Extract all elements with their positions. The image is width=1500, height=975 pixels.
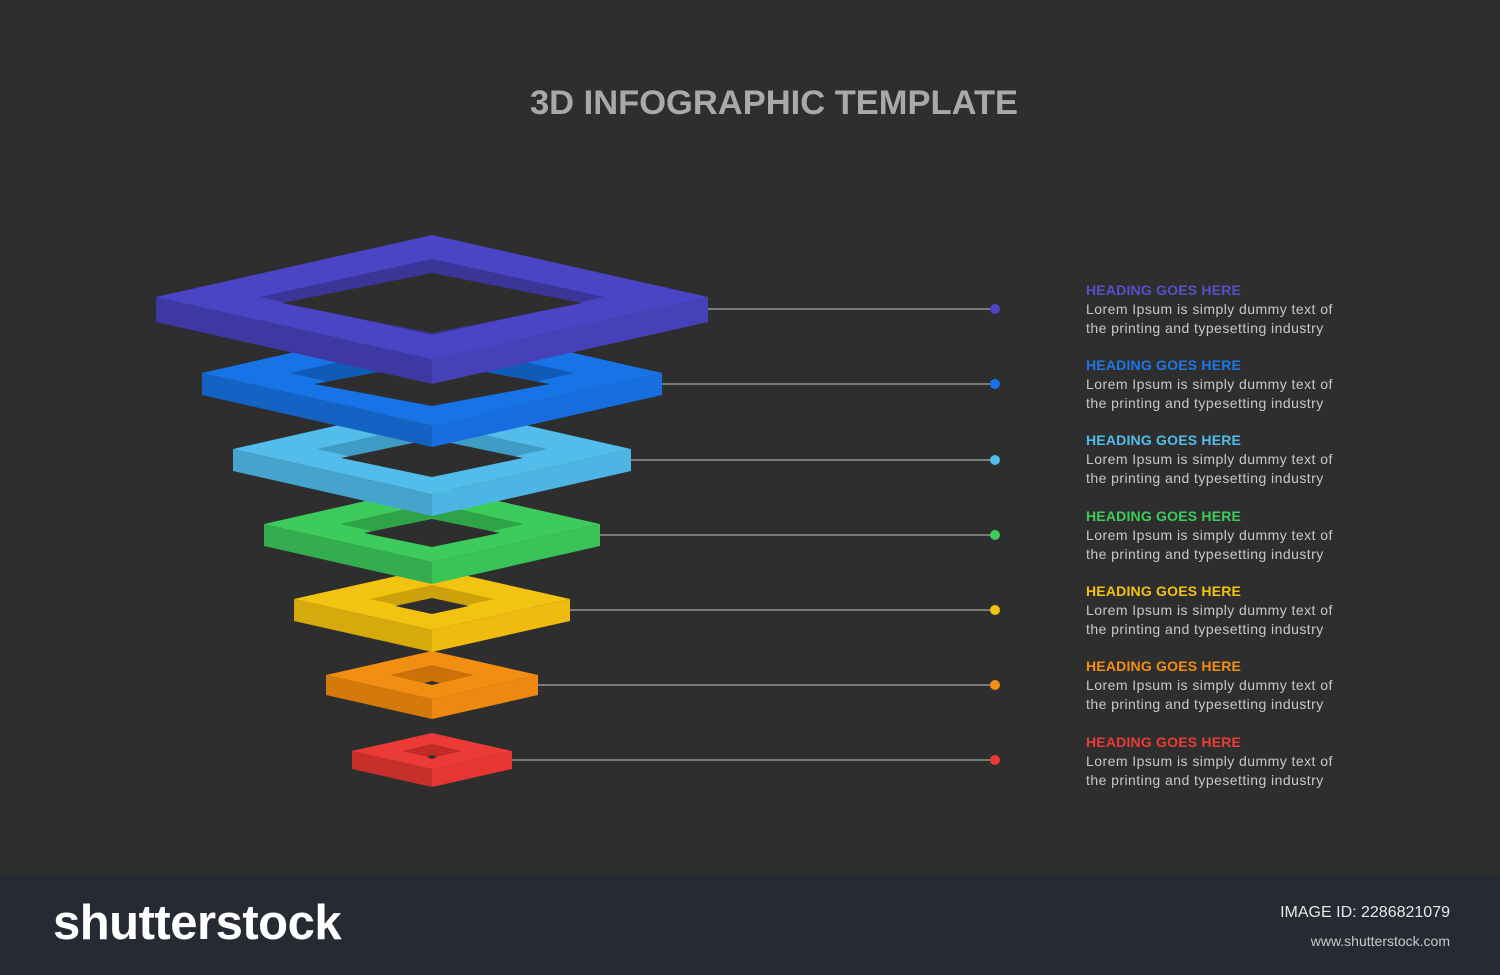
- text block 7: the printing and typesetting industry: [1086, 772, 1324, 788]
- dots: [990, 304, 1000, 765]
- text block 3: [1086, 432, 1333, 486]
- text block 1: the printing and typesetting industry: [1086, 320, 1324, 336]
- text block 6: Lorem Ipsum is simply dummy text of: [1086, 677, 1333, 693]
- text block 6: [1086, 658, 1333, 712]
- frame 2 blue: [202, 321, 662, 447]
- text block 7: HEADING GOES HERE: [1086, 734, 1241, 750]
- text block 1: [1086, 282, 1333, 336]
- text block 3: Lorem Ipsum is simply dummy text of: [1086, 451, 1333, 467]
- footer logo: shutterstock: [53, 896, 341, 950]
- text block 5: HEADING GOES HERE: [1086, 583, 1241, 599]
- footer url: www.shutterstock.com: [1311, 933, 1450, 949]
- text block 4: [1086, 508, 1333, 562]
- text block 2: HEADING GOES HERE: [1086, 357, 1241, 373]
- frame 5 yellow: [294, 568, 570, 652]
- text block 1: Lorem Ipsum is simply dummy text of: [1086, 301, 1333, 317]
- frame 1 purple: [156, 235, 708, 384]
- frame 3 light blue: [233, 404, 631, 516]
- text block 5: [1086, 583, 1333, 637]
- text block 3: the printing and typesetting industry: [1086, 470, 1324, 486]
- frame 6 orange: [326, 651, 538, 719]
- footer image id: IMAGE ID: 2286821079: [1280, 904, 1450, 921]
- text block 2: [1086, 357, 1333, 411]
- text block 2: Lorem Ipsum is simply dummy text of: [1086, 376, 1333, 392]
- text block 4: the printing and typesetting industry: [1086, 546, 1324, 562]
- text block 6: the printing and typesetting industry: [1086, 696, 1324, 712]
- text block 6: HEADING GOES HERE: [1086, 658, 1241, 674]
- text block 4: Lorem Ipsum is simply dummy text of: [1086, 527, 1333, 543]
- text block 4: HEADING GOES HERE: [1086, 508, 1241, 524]
- text block 1: HEADING GOES HERE: [1086, 282, 1241, 298]
- frame 4 green: [264, 486, 600, 584]
- connector lines: [512, 309, 995, 760]
- text block 5: the printing and typesetting industry: [1086, 621, 1324, 637]
- footer bar: [0, 875, 1500, 975]
- title: 3D INFOGRAPHIC TEMPLATE: [530, 84, 1018, 122]
- text block 7: Lorem Ipsum is simply dummy text of: [1086, 753, 1333, 769]
- text block 5: Lorem Ipsum is simply dummy text of: [1086, 602, 1333, 618]
- text block 3: HEADING GOES HERE: [1086, 432, 1241, 448]
- frame 7 red: [352, 733, 512, 787]
- text block 2: the printing and typesetting industry: [1086, 395, 1324, 411]
- text block 7: [1086, 734, 1333, 788]
